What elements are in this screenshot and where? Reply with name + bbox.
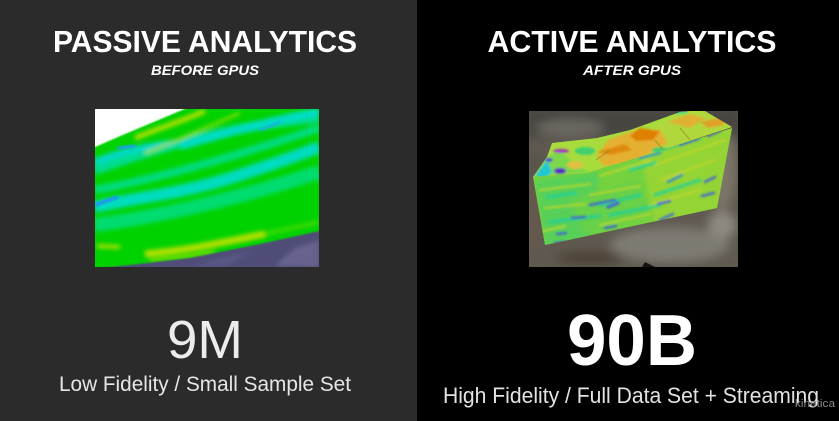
image: low fidelity seismic heat map: [90, 104, 324, 272]
subtitle: before GPUs: BEFORE GPUS: [151, 62, 260, 78]
subtitle: after GPUs: AFTER GPUS: [582, 62, 682, 78]
metric: 9M: 9M: [167, 310, 243, 370]
metric: 90B: 90B: [567, 301, 697, 381]
panel: passive analytics: [0, 0, 417, 421]
panel: active analytics: [444, 30, 836, 408]
title: active analytics: ACTIVE ANALYTICS: [488, 24, 776, 59]
watermark: kinetica: kinetica: [795, 398, 836, 410]
caption: high fidelity: High Fidelity / Full Data Set + Streaming: [443, 383, 819, 408]
block: top face: [533, 111, 732, 177]
title: passive analytics: PASSIVE ANALYTICS: [53, 24, 357, 59]
block: front face: [533, 128, 732, 245]
image: high fidelity 3D seismic block: [525, 105, 742, 271]
caption: low fidelity: Low Fidelity / Small Sample Set: [59, 373, 351, 396]
